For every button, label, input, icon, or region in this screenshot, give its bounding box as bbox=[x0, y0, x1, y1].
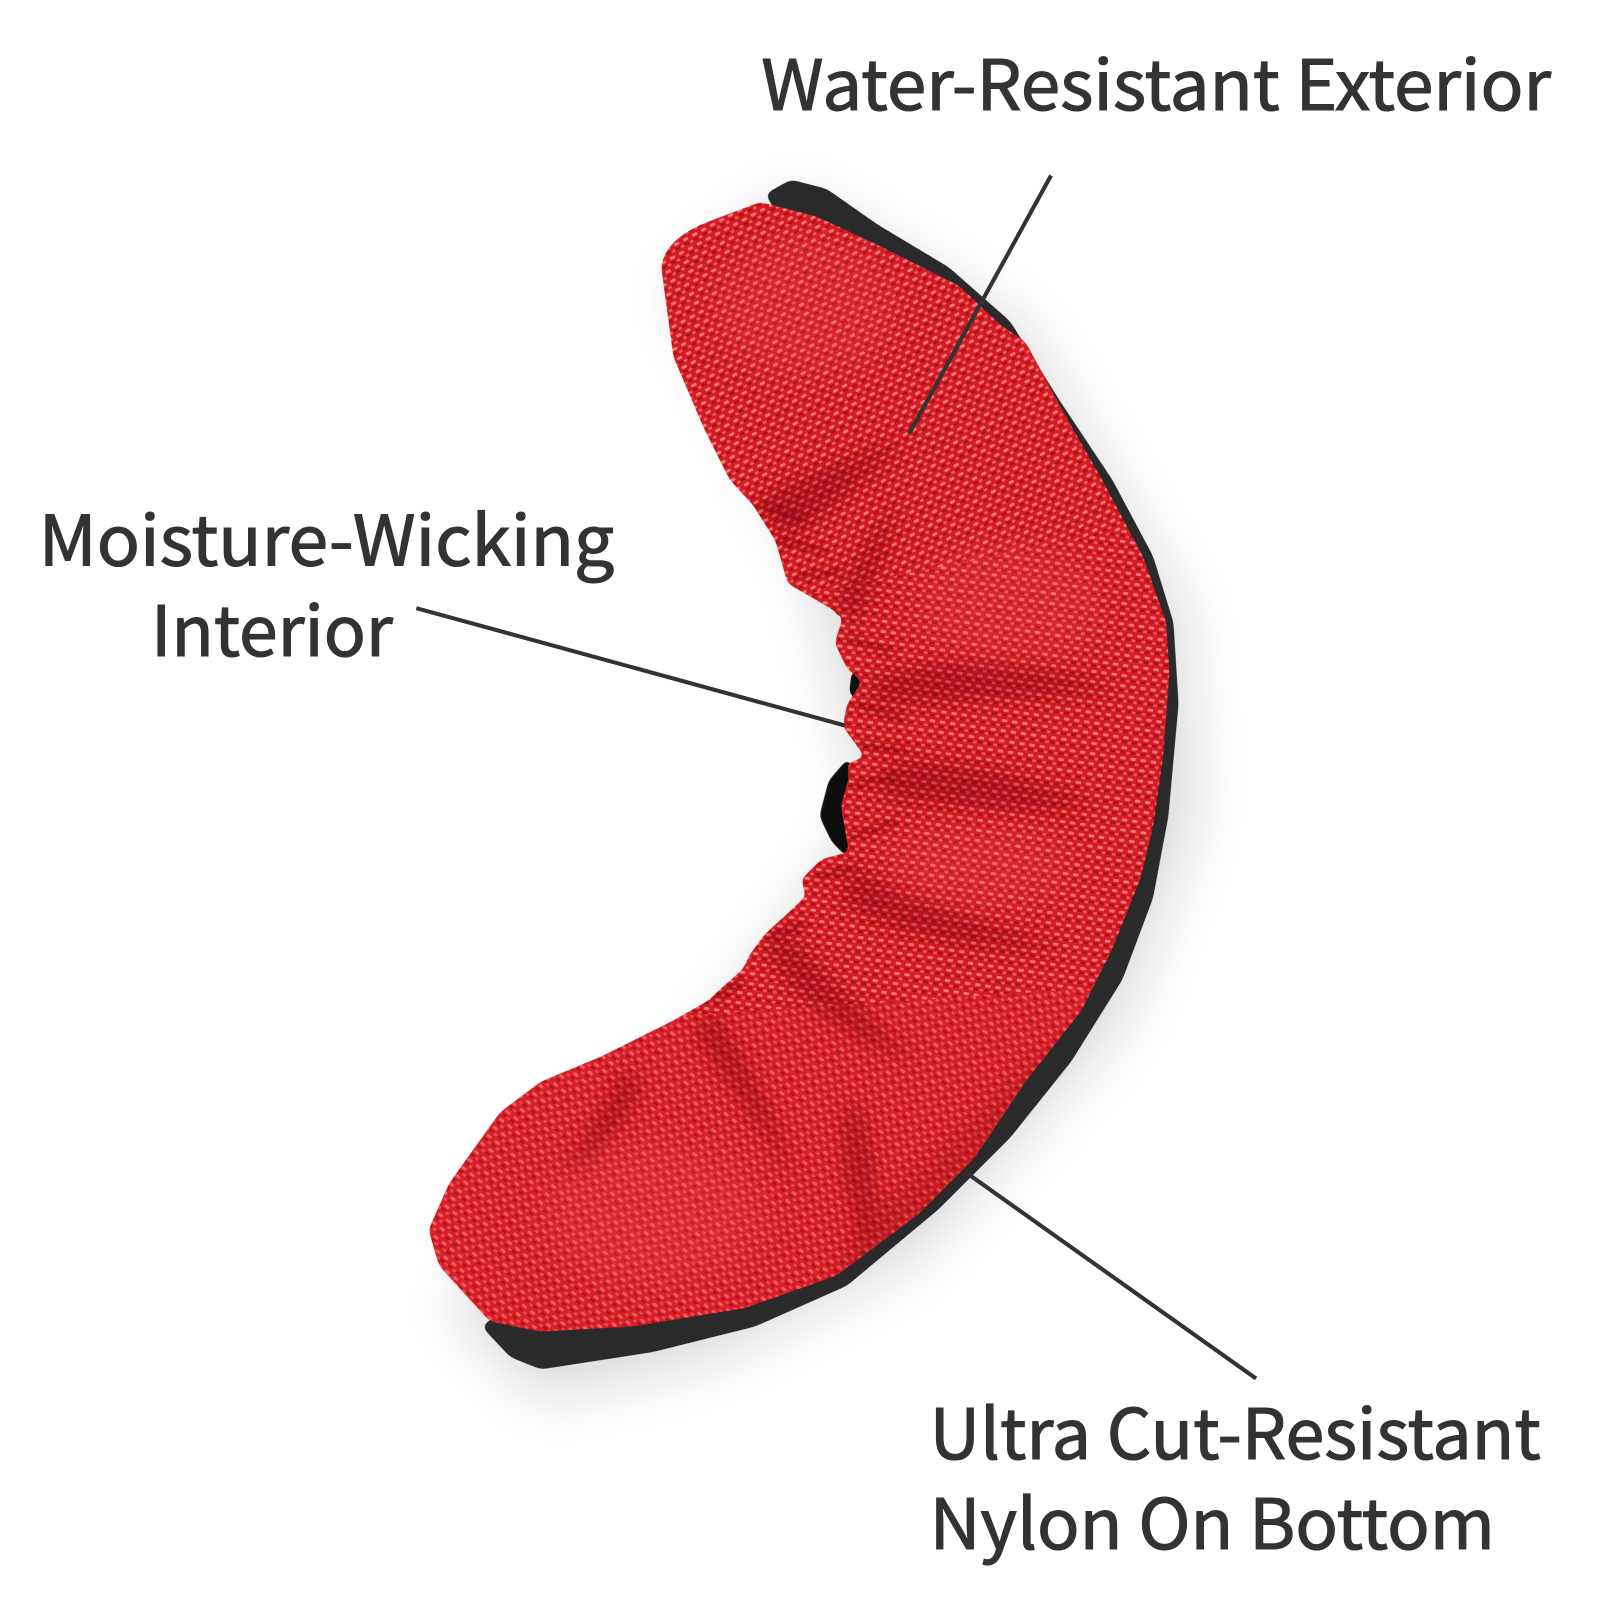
leader line: ultra cut-resistant nylon bbox=[967, 1173, 1256, 1379]
label: ultra cut-resistant nylon on bottom bbox=[930, 1379, 1541, 1569]
fabric highlights bbox=[541, 235, 1102, 1286]
label: ultra cut-resistant nylon on bottom: Nylon On Bottom bbox=[930, 1469, 1495, 1569]
inner edge pleats bbox=[714, 505, 908, 1000]
black moisture-wicking interior bbox=[806, 587, 867, 903]
leader line: water-resistant exterior bbox=[909, 176, 1051, 434]
product shadow bbox=[449, 194, 1194, 1398]
label: moisture-wicking interior bbox=[39, 485, 614, 676]
black nylon bottom bbox=[482, 180, 1179, 1369]
label: ultra cut-resistant nylon on bottom: Ultra Cut-Resistant bbox=[930, 1379, 1541, 1479]
label: moisture-wicking interior: Interior bbox=[151, 576, 394, 676]
product: skate blade cover bbox=[429, 180, 1178, 1369]
label: water-resistant exterior: Water-Resistant Exterior bbox=[761, 30, 1552, 130]
darker edge shading bbox=[830, 1037, 1060, 1277]
leader line: moisture-wicking interior bbox=[416, 608, 845, 726]
fabric folds bbox=[561, 439, 1122, 1255]
label: moisture-wicking interior: Moisture-Wicking bbox=[39, 485, 614, 585]
red water-resistant fabric bbox=[429, 202, 1170, 1332]
